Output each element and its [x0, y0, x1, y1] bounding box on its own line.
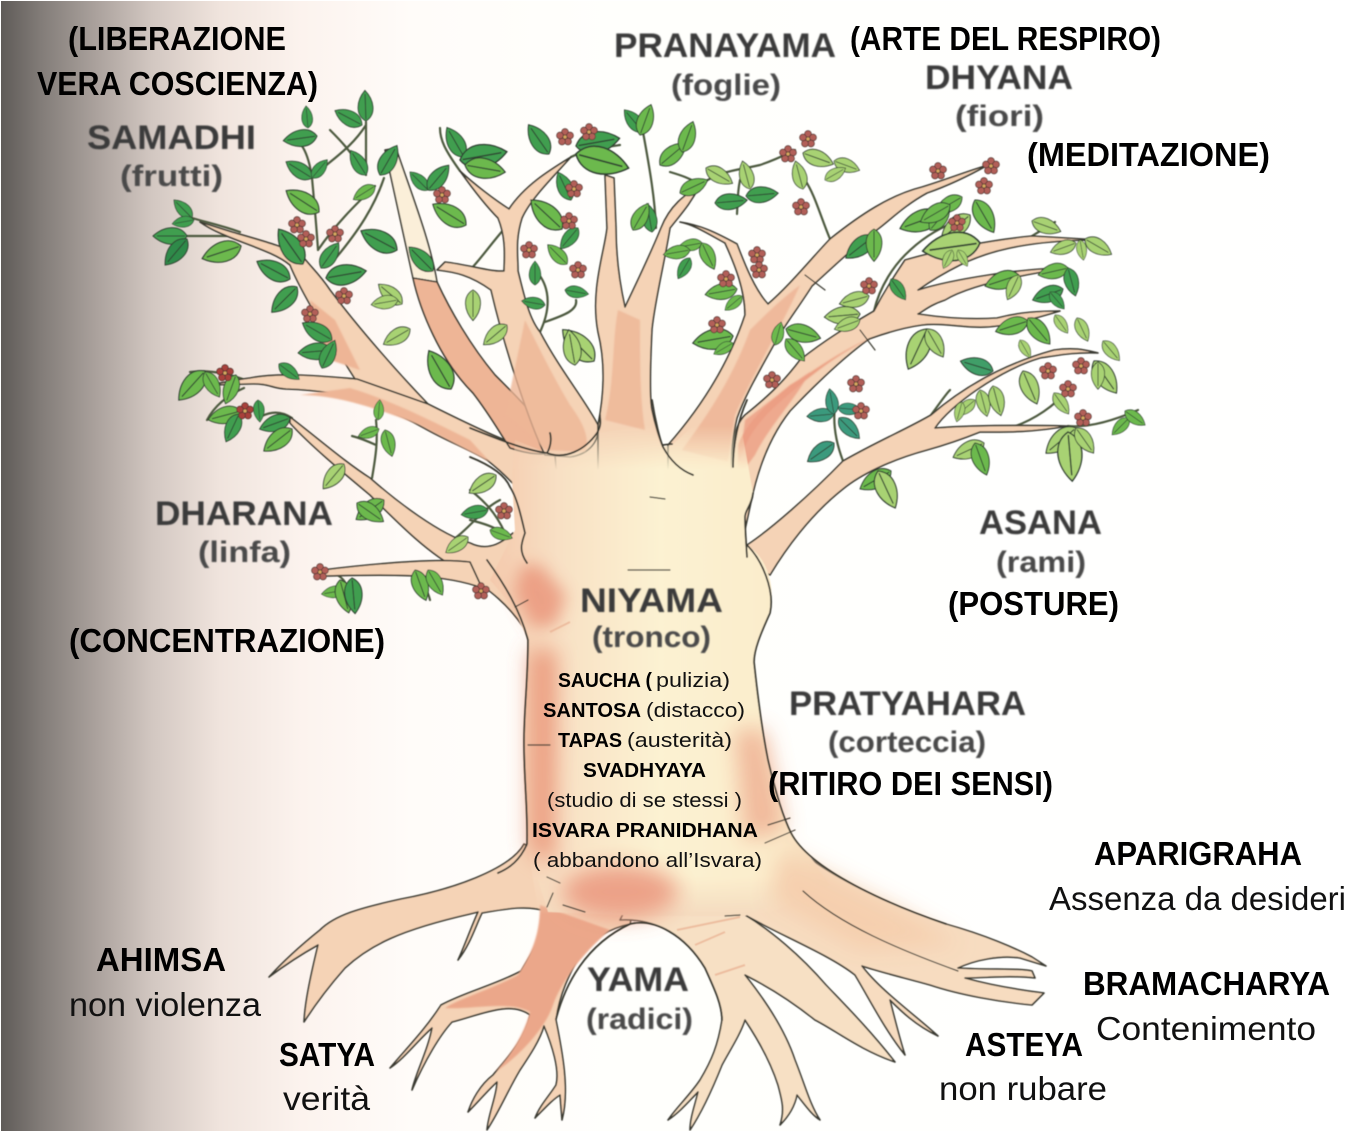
label: pratyahara: PRATYAHARA — [789, 685, 1026, 723]
branch stems — [187, 122, 1138, 600]
yama: ahimsa: AHIMSA — [96, 941, 226, 978]
tapas: (austerità) — [627, 729, 732, 752]
branch: upper right — [668, 165, 988, 490]
branch: centre left limb — [413, 278, 552, 454]
svadhyaya: (studio di se stessi ) — [547, 789, 742, 812]
label: yama: YAMA — [587, 961, 689, 999]
yama: asteya — [939, 1026, 1107, 1107]
label: dhyana: (fiori) — [955, 100, 1044, 133]
branches — [200, 148, 1100, 633]
label: dhyana — [925, 59, 1073, 133]
label: asana: (rami) — [996, 546, 1086, 579]
yama: satya: SATYA — [279, 1036, 375, 1073]
caption: liberazione vera coscienza: VERA COSCIENZA) — [37, 65, 318, 102]
trunk body — [491, 428, 794, 910]
caption: posture: (POSTURE) — [948, 585, 1119, 622]
trunk — [470, 275, 960, 1020]
root: centre right — [620, 880, 895, 1130]
label: pranayama: PRANAYAMA — [614, 27, 836, 65]
trunk underlay at root junction — [527, 840, 830, 916]
trunk salmon shading — [530, 650, 960, 950]
arch outline over yama — [556, 923, 722, 1020]
label: dhyana: DHYANA — [925, 59, 1073, 97]
saucha — [558, 669, 730, 692]
label: pratyahara — [789, 685, 1026, 759]
bark salmon stripes — [550, 622, 745, 975]
caption: liberazione vera coscienza — [37, 20, 318, 102]
yama: satya — [279, 1036, 375, 1117]
label: samadhi: SAMADHI — [87, 119, 256, 157]
branch: samadhi upper — [200, 222, 428, 404]
yama: ahimsa: non violenza — [69, 986, 262, 1023]
branch: central — [596, 175, 700, 490]
label: pranayama — [614, 27, 836, 102]
label: dharana — [155, 495, 333, 569]
yama: bramacharya — [1083, 965, 1330, 1047]
label: dharana: (linfa) — [198, 536, 291, 569]
branch shading — [300, 285, 872, 478]
tree part labels (soft grey) — [87, 27, 1102, 1036]
label: yama: (radici) — [586, 1003, 693, 1036]
santosa: (distacco) — [646, 699, 745, 722]
yama: asteya: non rubare — [939, 1070, 1107, 1107]
leaves: centre canopy — [406, 102, 862, 369]
yama: asteya: ASTEYA — [965, 1026, 1083, 1063]
label: pratyahara: (corteccia) — [828, 726, 986, 759]
leaves: lower left — [172, 359, 514, 615]
isvara pranidhana: ( abbandono all’Isvara) — [533, 849, 762, 872]
label: samadhi: (frutti) — [120, 160, 223, 193]
flowers — [217, 124, 1091, 599]
yama: ahimsa — [69, 941, 262, 1023]
root: right — [700, 830, 1046, 1055]
label: samadhi — [87, 119, 256, 193]
yama: bramacharya: BRAMACHARYA — [1083, 965, 1330, 1002]
svadhyaya — [547, 759, 742, 812]
label: niyama — [580, 582, 723, 654]
label: niyama: NIYAMA — [580, 582, 723, 620]
yama: bramacharya: Contenimento — [1096, 1010, 1316, 1047]
label: asana: ASANA — [979, 504, 1102, 542]
bark ticks and root inner lines — [515, 275, 958, 971]
leaves: right canopy — [803, 191, 1148, 512]
caption: meditazione: (MEDITAZIONE) — [1027, 136, 1270, 173]
illustration: tree — [153, 90, 1148, 1130]
trunk outline — [487, 560, 528, 873]
label: niyama: (tronco) — [592, 621, 711, 654]
caption: liberazione vera coscienza: (LIBERAZIONE — [68, 20, 286, 57]
yama: aparigraha: APARIGRAHA — [1094, 835, 1302, 872]
roots — [269, 830, 1046, 1130]
svadhyaya: SVADHYAYA — [583, 759, 706, 782]
yama: aparigraha — [1049, 835, 1346, 917]
caption: ritiro dei sensi: (RITIRO DEI SENSI) — [768, 765, 1053, 802]
branch: second limb — [437, 157, 598, 457]
caption: concentrazione: (CONCENTRAZIONE) — [69, 622, 385, 659]
trunk shoulder streak — [514, 565, 566, 628]
leaves: left canopy — [153, 90, 512, 394]
branch: lower left limb — [210, 375, 560, 520]
saucha: SAUCHA ( — [558, 669, 652, 692]
yama: aparigraha: Assenza da desideri — [1049, 880, 1346, 917]
trunk underlay joining limbs and roots — [512, 430, 750, 540]
label: asana — [979, 504, 1102, 579]
tapas — [558, 729, 732, 752]
root: left — [269, 844, 560, 1022]
label: pranayama: (foglie) — [671, 69, 781, 102]
branch: dharana lower twig — [322, 561, 482, 588]
santosa — [543, 699, 745, 722]
trunk list: niyama observances — [532, 669, 762, 872]
isvara pranidhana — [532, 819, 762, 872]
santosa: SANTOSA — [543, 699, 641, 722]
saucha: pulizia) — [656, 669, 730, 692]
yama: satya: verità — [283, 1080, 371, 1117]
branch: asana — [747, 349, 1098, 575]
isvara pranidhana: ISVARA PRANIDHANA — [532, 819, 758, 842]
branch: pale extension — [385, 148, 437, 282]
branch: dharana — [290, 417, 540, 633]
label: dharana: DHARANA — [155, 495, 333, 533]
tapas: TAPAS — [558, 729, 622, 752]
root shading — [445, 905, 610, 1072]
root: centre left — [390, 870, 640, 1130]
caption: arte del respiro: (ARTE DEL RESPIRO) — [850, 20, 1161, 57]
branch: right — [720, 236, 1100, 530]
limb junction outlines — [470, 400, 747, 475]
label: yama — [586, 961, 693, 1036]
